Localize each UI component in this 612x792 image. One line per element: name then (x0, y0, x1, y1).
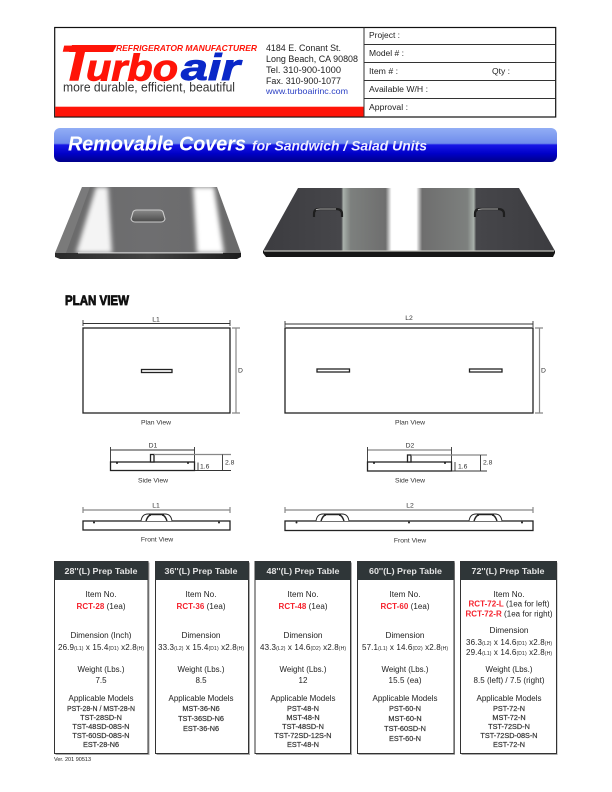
project form: Project : (369, 31, 400, 40)
version note: Ver. 201 90513 (54, 757, 91, 763)
panel: 28 inch prep table: Dimension (Inch) (70, 631, 132, 640)
panel: 48 inch prep table: Dimension (284, 631, 322, 640)
panel: 36 inch prep table: EST-36-N6 (183, 724, 219, 733)
panel: 28 inch prep table: 26.9(L1) x 15.4(D1) x2.8(H) (58, 643, 144, 652)
panel: 72 inch prep table: MST-72-N (492, 713, 526, 722)
panel: 60 inch prep table: Applicable Models (372, 694, 438, 703)
drawing: front view L2 (285, 502, 533, 544)
panel: 36 inch prep table: Weight (Lbs.) (178, 665, 225, 674)
panel: 48 inch prep table (255, 562, 352, 755)
panel: 48 inch prep table: 43.3(L2) x 14.6(D2) x2.8(H) (260, 643, 346, 652)
panel: 48 inch prep table: 48''(L) Prep Table (266, 566, 340, 576)
panel: 36 inch prep table: MST-36-N6 (182, 704, 220, 713)
drawing: front view L1: L1 (152, 502, 160, 510)
drawing: front view L1 (83, 502, 230, 544)
contact info: Fax. 310-900-1077 (266, 76, 341, 86)
drawing: side view D2: 2.8 (483, 460, 493, 466)
project form: Approval : (369, 103, 408, 112)
drawing: plan view L2: Plan View (395, 420, 425, 426)
panel: 60 inch prep table: PST-60-N (389, 704, 421, 713)
panel: 72 inch prep table: 8.5 (left) / 7.5 (right) (474, 676, 545, 685)
panel: 36 inch prep table: Dimension (182, 631, 220, 640)
panel: 72 inch prep table: Weight (Lbs.) (486, 665, 533, 674)
logo: Turbo air: T (59, 36, 100, 92)
drawing: plan view L2: L2 (405, 315, 413, 322)
panel: 48 inch prep table: PST-48-N (287, 704, 319, 713)
panel: 72 inch prep table: PST-72-N (493, 704, 525, 713)
panel: 28 inch prep table: Weight (Lbs.) (78, 665, 125, 674)
photo: single handle cover (50, 187, 241, 259)
panel: 28 inch prep table: 28''(L) Prep Table (64, 566, 138, 576)
panel: 60 inch prep table: EST-60-N (389, 734, 421, 743)
panel: 48 inch prep table: Applicable Models (270, 694, 336, 703)
project form: Item # : (369, 67, 398, 76)
header box (55, 28, 556, 117)
drawing: side view D1: 2.8 (225, 460, 235, 466)
contact info: www.turboairinc.com (265, 86, 348, 96)
drawing: side view D1: Side View (138, 478, 168, 484)
photo: double handle cover (263, 188, 555, 257)
drawing: front view L1: Front View (141, 536, 173, 544)
panel: 72 inch prep table: EST-72-N (493, 740, 525, 749)
panel: 36 inch prep table: Item No. (186, 590, 216, 599)
contact info (265, 43, 358, 96)
drawing: plan view L1: D (238, 368, 243, 374)
panel: 48 inch prep table: TST-72SD-12S-N (274, 731, 332, 740)
contact info: Tel. 310-900-1000 (266, 65, 341, 75)
panel: 28 inch prep table: 7.5 (95, 676, 107, 685)
drawing: side view D2 (368, 442, 493, 484)
drawing: plan view L1 (83, 316, 243, 426)
logo: Turbo air: urbo (86, 48, 178, 88)
panel: 60 inch prep table: Dimension (386, 631, 424, 640)
panel: 28 inch prep table: TST-28SD-N (80, 713, 122, 722)
panel: 28 inch prep table: Applicable Models (68, 694, 134, 703)
panel: 48 inch prep table: EST-48-N (287, 740, 319, 749)
drawing: plan view L2 (285, 315, 546, 426)
panel: 72 inch prep table: Item No. (494, 590, 524, 599)
project form: Model # : (369, 49, 404, 58)
panel: 72 inch prep table: Applicable Models (476, 694, 542, 703)
panel: 72 inch prep table: Dimension (490, 626, 528, 635)
panel: 48 inch prep table: RCT-48 (1ea) (278, 602, 328, 611)
panel: 72 inch prep table: 36.3(L2) x 14.6(D1) x2.8(H) (466, 638, 552, 647)
panel: 60 inch prep table: 60''(L) Prep Table (369, 566, 442, 576)
panel: 48 inch prep table: 12 (299, 676, 308, 685)
panel: 60 inch prep table: 57.1(L1) x 14.6(D2) x2.8(H) (362, 643, 448, 652)
panel: 60 inch prep table: TST-60SD-N (384, 724, 426, 733)
panel: 36 inch prep table: 33.3(L2) x 15.4(D1) x2.8(H) (158, 643, 244, 652)
panel: 36 inch prep table: RCT-36 (1ea) (176, 602, 226, 611)
panel: 28 inch prep table: PST-28-N / MST-28-N (67, 704, 135, 713)
drawing: side view D1 (110, 442, 235, 484)
drawing: side view D2: D2 (406, 442, 415, 450)
contact info: Long Beach, CA 90808 (266, 54, 358, 64)
logo: Turbo air (59, 36, 243, 92)
drawing: plan view L2: D (541, 368, 546, 374)
drawing: side view D2: 1.6 (458, 464, 468, 470)
panel: 48 inch prep table: TST-48SD-N (282, 722, 324, 731)
panel: 60 inch prep table: 15.5 (ea) (388, 676, 422, 685)
panel: 36 inch prep table: 36''(L) Prep Table (164, 566, 238, 576)
panel: 28 inch prep table: Item No. (86, 590, 116, 599)
drawing: side view D1: 1.6 (200, 464, 210, 470)
panel: 28 inch prep table: TST-60SD-08S-N (72, 731, 130, 740)
project form: Available W/H : (369, 85, 428, 94)
panel: 60 inch prep table: MST-60-N (388, 714, 422, 723)
panel: 72 inch prep table: TST-72SD-08S-N (480, 731, 538, 740)
panel: 48 inch prep table: Weight (Lbs.) (280, 665, 327, 674)
panel: 28 inch prep table (54, 562, 150, 755)
panel: 72 inch prep table: RCT-72-R (1ea for right) (466, 610, 553, 618)
panel: 36 inch prep table: 8.5 (195, 676, 207, 685)
red band (55, 107, 364, 116)
title bar: Removable Covers (68, 132, 246, 156)
drawing: plan view L1: L1 (152, 316, 160, 324)
drawing: front view L2: Front View (394, 538, 426, 544)
panel: 72 inch prep table: RCT-72-L (1ea for left) (468, 600, 550, 608)
drawing: side view D1: D1 (149, 442, 158, 450)
drawing: plan view L1: Plan View (141, 420, 171, 426)
panel: 36 inch prep table: Applicable Models (168, 694, 234, 703)
drawing: side view D2: Side View (395, 478, 425, 484)
heading: plan view: PLAN VIEW (65, 293, 129, 308)
panel: 48 inch prep table: MST-48-N (286, 713, 320, 722)
panel: 72 inch prep table: TST-72SD-N (488, 722, 530, 731)
slogan: more durable, efficient, beautiful (63, 80, 235, 94)
logo: Turbo air: air (181, 47, 243, 88)
panel: 60 inch prep table: Weight (Lbs.) (382, 665, 429, 674)
panel: 60 inch prep table: Item No. (390, 590, 420, 599)
panel: 72 inch prep table (460, 562, 558, 755)
panel: 28 inch prep table: EST-28-N6 (83, 740, 119, 749)
panel: 28 inch prep table: RCT-28 (1ea) (76, 602, 126, 611)
panel: 48 inch prep table: Item No. (288, 590, 318, 599)
project form (364, 28, 556, 117)
panel: 60 inch prep table (358, 562, 455, 755)
panel: 72 inch prep table: 29.4(L1) x 14.6(D1) x2.8(H) (466, 648, 552, 657)
panel: 72 inch prep table: 72''(L) Prep Table (472, 566, 545, 576)
contact info: 4184 E. Conant St. (266, 43, 341, 53)
title bar (54, 128, 557, 162)
logo tagline top: REFRIGERATOR MANUFACTURER (116, 43, 257, 53)
panel: 28 inch prep table: TST-48SD-08S-N (72, 722, 130, 731)
title bar: for Sandwich / Salad Units (252, 138, 428, 154)
panel: 60 inch prep table: RCT-60 (1ea) (380, 602, 430, 611)
panel: 36 inch prep table (156, 562, 250, 755)
project form: Qty : (492, 67, 510, 76)
panel: 36 inch prep table: TST-36SD-N6 (178, 714, 224, 723)
drawing: front view L2: L2 (406, 502, 414, 510)
